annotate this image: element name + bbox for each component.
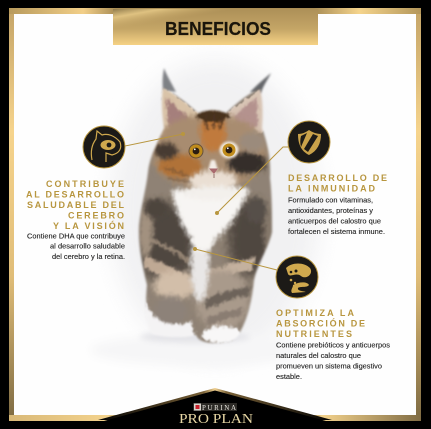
body: immunity: fortalecen el sistema inmune. xyxy=(288,227,385,236)
body: brain and vision: del cerebro y la retina. xyxy=(52,252,125,261)
body xyxy=(140,203,194,287)
heading banner: BENEFICIOS xyxy=(113,9,318,45)
body: immunity: anticuerpos del calostro que xyxy=(288,216,381,226)
body: brain and vision: Contiene DHA que contribuye xyxy=(27,232,125,240)
heading: nutrients xyxy=(276,308,365,339)
heading: brain and vision xyxy=(26,179,124,231)
head xyxy=(151,114,267,190)
white chest xyxy=(172,188,248,251)
logo: Purina Pro Plan on black peak xyxy=(0,388,431,429)
heading: brain and vision: Y LA VISIÓN xyxy=(53,220,124,231)
body: immunity: antioxidantes, proteínas y xyxy=(288,206,373,215)
heading: nutrients: OPTIMIZA LA xyxy=(276,308,354,318)
heading: brain and vision: CONTRIBUYE xyxy=(46,179,124,189)
body: immunity: Formulado con vitaminas, xyxy=(288,196,373,204)
body: nutrients: Contiene prebióticos y anticuerpos xyxy=(276,340,390,350)
kitten photo illustration xyxy=(137,68,274,345)
icon: digestive system xyxy=(276,256,318,298)
body: nutrients: estable. xyxy=(276,372,302,381)
icon: shield xyxy=(288,121,330,163)
body: nutrients: promueven un sistema digestivo xyxy=(276,362,382,370)
body: brain and vision xyxy=(27,232,125,261)
pro plan wordmark: PRO PLAN xyxy=(179,411,253,426)
heading: nutrients: NUTRIENTES xyxy=(276,329,352,339)
heading: immunity: LA INMUNIDAD xyxy=(288,184,376,194)
legs xyxy=(153,271,197,299)
heading: brain and vision: CEREBRO xyxy=(68,210,124,220)
heading: immunity: DESARROLLO DE xyxy=(288,173,387,183)
heading banner: BENEFICIOS: BENEFICIOS xyxy=(165,19,271,39)
heading: immunity xyxy=(288,173,387,194)
connector: immunity xyxy=(215,147,289,215)
purina badge: PURINA xyxy=(202,404,236,412)
ears xyxy=(160,88,199,134)
connector: brain and vision xyxy=(125,132,185,146)
body: brain and vision: al desarrollo saludable xyxy=(50,242,125,250)
text block: nutrients xyxy=(276,308,390,381)
body: nutrients: naturales del calostro que xyxy=(276,351,361,360)
connector: nutrients xyxy=(193,247,277,270)
purina badge xyxy=(193,403,237,412)
ear tufts xyxy=(163,68,176,92)
heading: nutrients: ABSORCIÓN DE xyxy=(276,318,365,328)
body: immunity xyxy=(288,196,385,236)
body: nutrients xyxy=(276,340,390,381)
heading: brain and vision: AL DESARROLLO xyxy=(26,190,124,200)
kitten eyes and nose xyxy=(220,142,238,158)
text block: immunity xyxy=(288,173,387,236)
icon: cat head brain and eye xyxy=(83,126,125,168)
text block: brain and vision xyxy=(26,179,125,261)
heading: brain and vision: SALUDABLE DEL xyxy=(27,200,124,210)
